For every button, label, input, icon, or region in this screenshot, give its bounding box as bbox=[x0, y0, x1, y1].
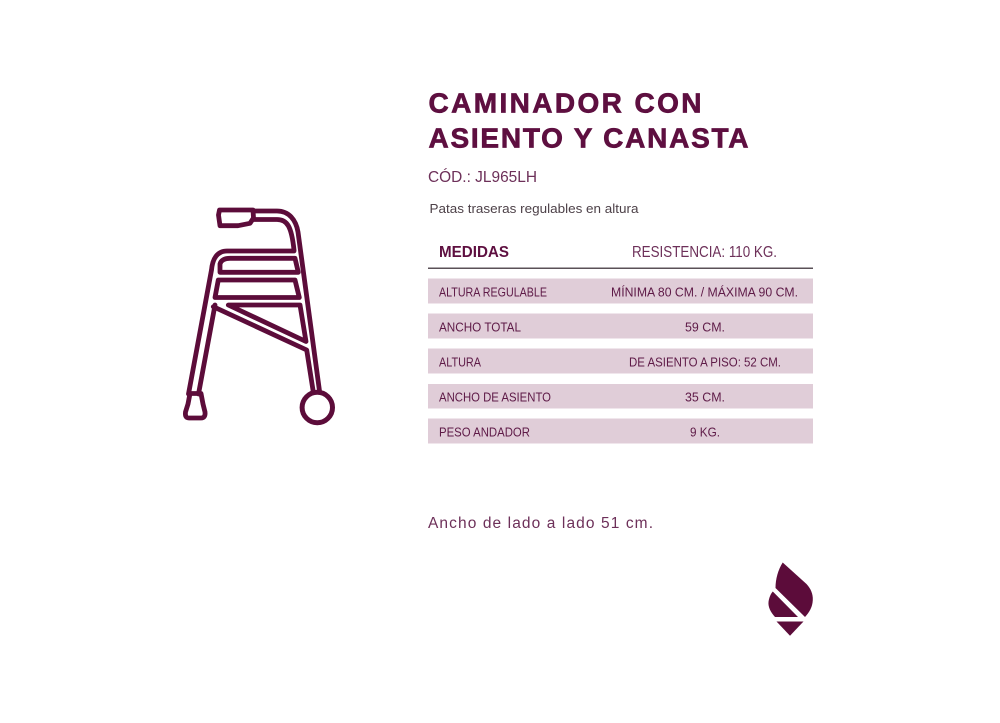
table header: MEDIDAS bbox=[439, 244, 509, 261]
walker top tube and rear leg bbox=[253, 211, 320, 391]
row: ancho de asiento bbox=[428, 384, 813, 408]
icon: logo bbox=[768, 562, 813, 636]
title bbox=[428, 88, 748, 154]
row: ancho total: 59 CM. bbox=[685, 320, 725, 334]
row: altura: ALTURA bbox=[439, 356, 482, 370]
walker front foot bbox=[185, 394, 205, 418]
table header bbox=[428, 244, 813, 269]
walker seat brace bbox=[228, 305, 306, 342]
row: peso andador: PESO ANDADOR bbox=[439, 426, 530, 440]
walker handle grip bbox=[218, 210, 254, 226]
row: ancho de asiento: 35 CM. bbox=[685, 390, 725, 404]
row: altura regulable: MÍNIMA 80 CM. / MÁXIMA 90 CM. bbox=[611, 284, 798, 300]
row: altura: DE ASIENTO A PISO: 52 CM. bbox=[629, 356, 781, 370]
table: medidas bbox=[428, 278, 813, 444]
row: ancho de asiento: ANCHO DE ASIENTO bbox=[439, 390, 551, 404]
walker rear wheel bbox=[302, 392, 332, 423]
table header: RESISTENCIA: 110 KG. bbox=[632, 244, 777, 261]
row: altura regulable: ALTURA REGULABLE bbox=[439, 286, 547, 300]
row: altura bbox=[428, 348, 813, 374]
note: width: Ancho de lado a lado 51 cm. bbox=[428, 515, 653, 532]
row: peso andador: 9 KG. bbox=[690, 426, 720, 440]
row: ancho total: ANCHO TOTAL bbox=[439, 320, 521, 334]
walker basket lower bbox=[215, 280, 299, 298]
title: ASIENTO Y CANASTA bbox=[428, 122, 748, 154]
description: Patas traseras regulables en altura bbox=[430, 201, 639, 216]
walker front leg bbox=[188, 251, 294, 394]
icon: walker bbox=[185, 210, 332, 423]
walker basket upper bbox=[220, 258, 298, 272]
product code: CÓD.: JL965LH bbox=[428, 169, 537, 186]
row: ancho total bbox=[428, 314, 813, 338]
row: altura regulable bbox=[428, 278, 813, 304]
title: CAMINADOR CON bbox=[428, 88, 702, 118]
row: peso andador bbox=[428, 418, 813, 444]
